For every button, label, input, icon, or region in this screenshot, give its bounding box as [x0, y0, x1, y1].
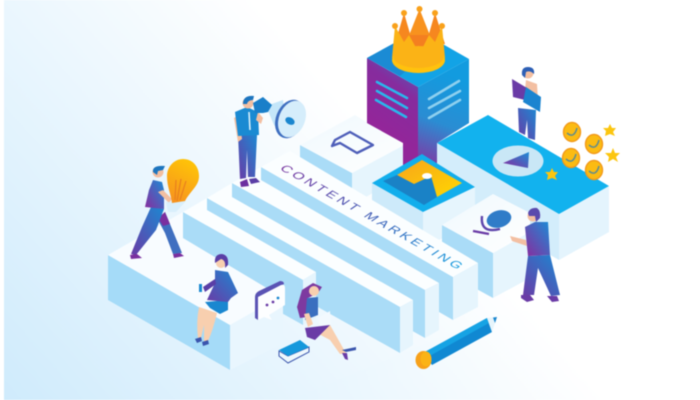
block: stair three	[232, 167, 439, 338]
icon: pencil	[416, 317, 497, 369]
figure: woman with tablet	[512, 67, 541, 140]
icon: emoji coins	[562, 122, 602, 180]
icon: microphone	[473, 208, 513, 234]
block: picture platform	[372, 154, 475, 248]
icon: stars	[545, 124, 620, 180]
block: stair one	[183, 198, 316, 325]
figure: woman reading	[297, 283, 356, 360]
icon: chat bubble	[255, 281, 285, 320]
icon: book	[279, 340, 309, 363]
figure: man with megaphone	[234, 96, 263, 187]
icon: tower right text lines	[429, 81, 460, 118]
block: play button platform	[437, 115, 609, 260]
icon: speech bubble	[332, 132, 373, 153]
icon: crown	[392, 6, 445, 73]
block: stair two	[207, 183, 413, 353]
block: purple tower	[367, 30, 469, 165]
block: speech bubble platform	[300, 115, 404, 205]
figure: man at microphone block	[510, 208, 560, 302]
panel: isometric stair blocks	[108, 30, 609, 370]
figure: man carrying light bulb	[130, 166, 184, 259]
block: bottom seating step	[108, 212, 283, 370]
block: tallest stair with title	[261, 151, 478, 320]
icon: play button	[492, 146, 544, 176]
figure: seated woman with phone	[195, 254, 238, 346]
icon: megaphone	[253, 95, 311, 143]
block: microphone platform	[442, 194, 530, 298]
icon: light bulb	[166, 159, 199, 212]
icon: tower left text lines	[376, 82, 407, 117]
icon: picture	[383, 160, 462, 205]
title: content marketing: CONTENT MARKETING	[277, 163, 467, 271]
